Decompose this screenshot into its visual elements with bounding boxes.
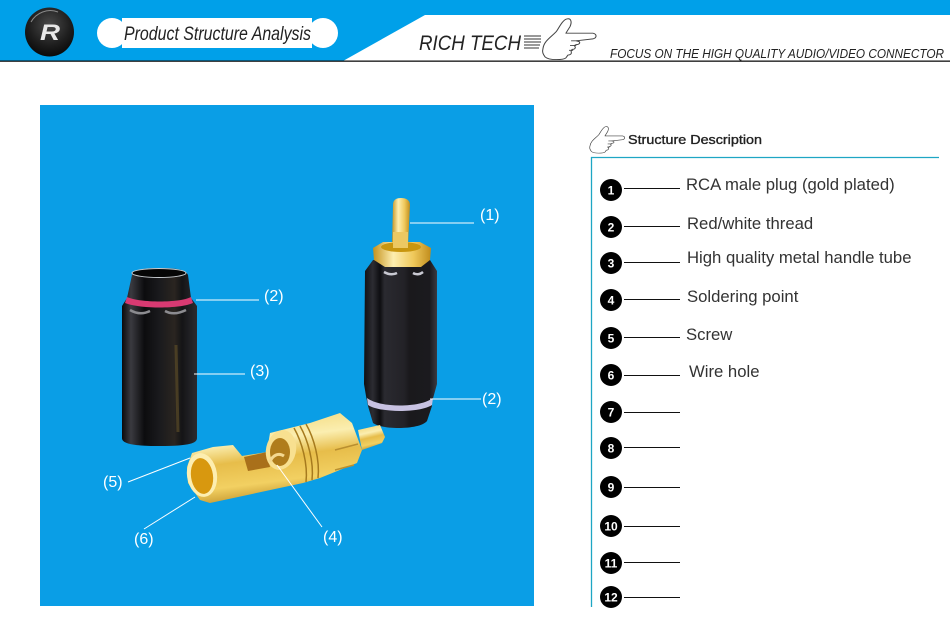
structure descriptions: RCA male plug (gold plated) xyxy=(686,175,895,194)
numbered badges: 7 xyxy=(608,406,615,420)
assembled plug xyxy=(364,198,437,428)
callout lines xyxy=(128,223,481,529)
numbered badges: 9 xyxy=(608,480,615,494)
numbered badges: 6 xyxy=(608,368,615,382)
numbered badges: 4 xyxy=(608,294,615,308)
heading: structure description: Structure Description xyxy=(628,132,762,147)
gold connector body xyxy=(184,413,385,503)
numbered badges: 3 xyxy=(608,256,615,270)
callout labels: (3) xyxy=(250,363,270,380)
structure descriptions: Soldering point xyxy=(687,287,799,306)
numbered badges: 5 xyxy=(608,332,615,346)
structure descriptions: High quality metal handle tube xyxy=(687,248,912,267)
panel frame: description list xyxy=(592,158,939,607)
title pill: Product Structure Analysis xyxy=(124,24,311,45)
icon: brand logo: R xyxy=(40,20,60,45)
callout labels: (2) xyxy=(264,288,284,305)
numbered badges: 1 xyxy=(608,184,615,198)
structure descriptions: Screw xyxy=(686,325,733,344)
callout labels: (6) xyxy=(134,531,154,548)
brand name: RICH TECH xyxy=(419,32,522,55)
structure descriptions xyxy=(686,175,912,381)
icon: brand logo xyxy=(25,8,74,56)
panel: product photo xyxy=(40,105,534,606)
icon: small pointing hand xyxy=(590,127,625,153)
structure descriptions: Wire hole xyxy=(689,362,759,381)
numbered badges xyxy=(600,179,622,608)
numbered badges: 11 xyxy=(605,556,618,570)
callout labels: (1) xyxy=(480,207,500,224)
numbered badges: 12 xyxy=(604,590,618,604)
structure descriptions: Red/white thread xyxy=(687,214,813,233)
callout labels xyxy=(103,207,502,548)
callout labels: (5) xyxy=(103,474,123,491)
icon: pointing hand with speed lines xyxy=(524,19,596,60)
callout labels: (4) xyxy=(323,529,343,546)
leader lines xyxy=(624,188,680,598)
numbered badges: 10 xyxy=(604,520,618,534)
title pill xyxy=(97,18,338,48)
numbered badges: 8 xyxy=(608,442,615,456)
black sleeve xyxy=(122,268,197,446)
header band xyxy=(0,0,950,62)
callout labels: (2) xyxy=(482,391,502,408)
numbered badges: 2 xyxy=(608,220,615,234)
